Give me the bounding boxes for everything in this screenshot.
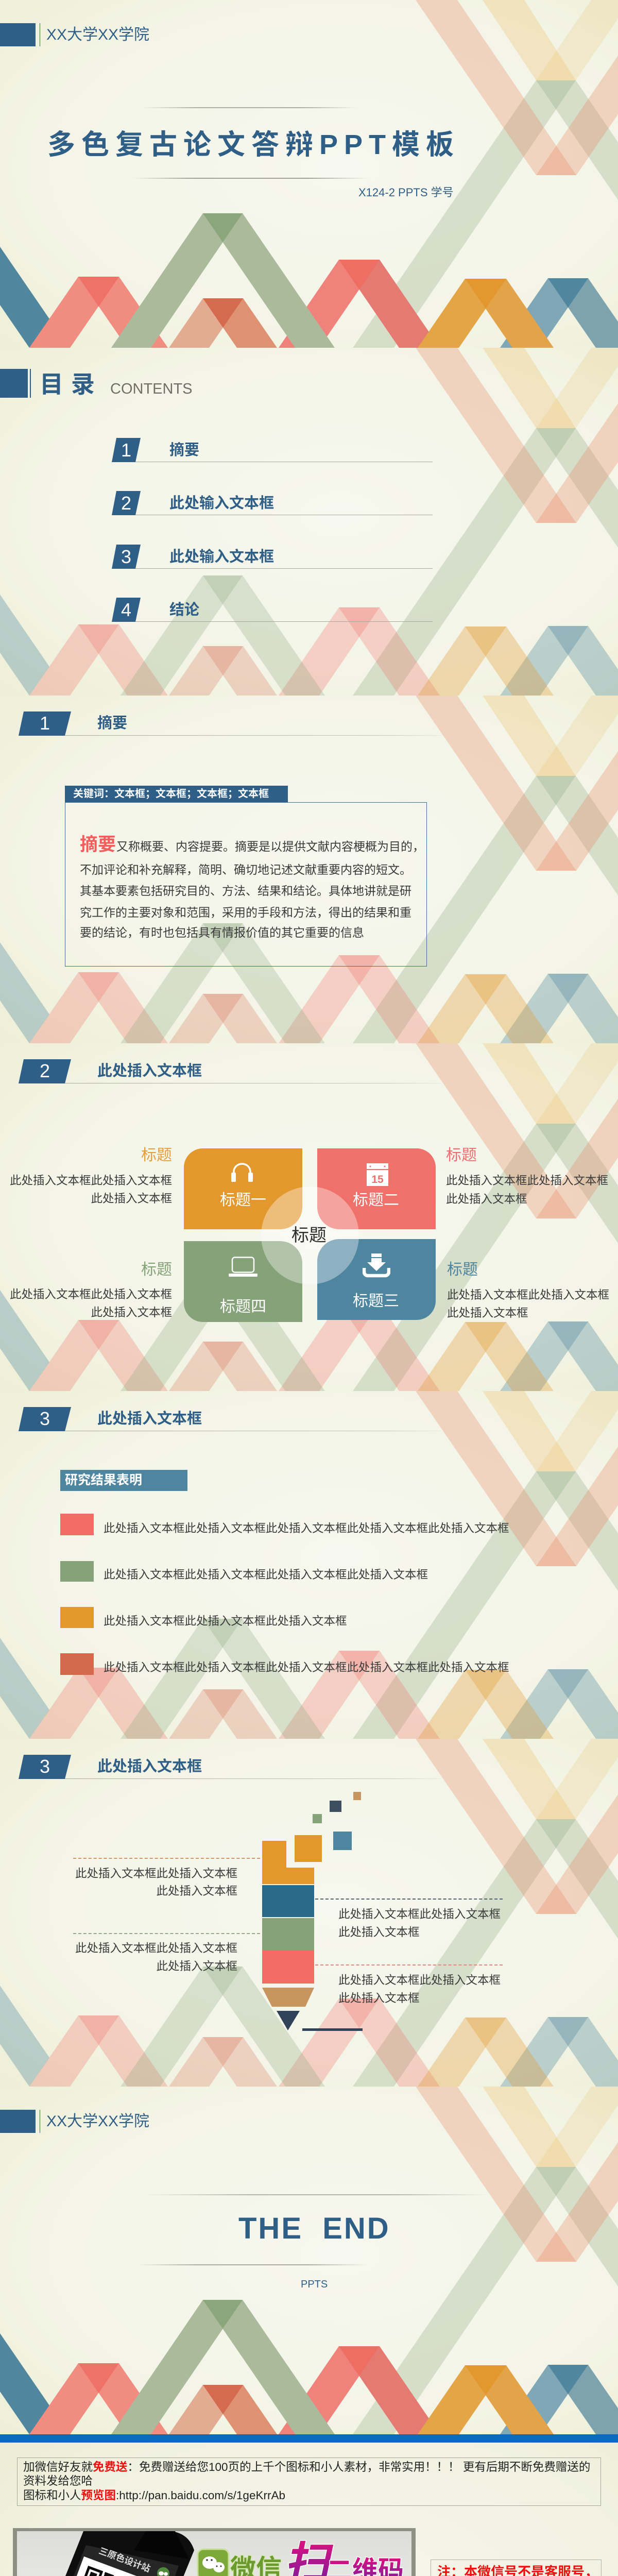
- text block: top right: 此处插入文本框此处插入文本框: [446, 1174, 608, 1187]
- result row 3: 此处插入文本框此处插入文本框此处插入文本框: [104, 1615, 347, 1628]
- callout: lower left: 此处插入文本框: [156, 1960, 237, 1973]
- title: 多色复古论文答辩PPT模板: [47, 129, 460, 160]
- result row 4: 此处插入文本框此处插入文本框此处插入文本框此处插入文本框此处插入文本框: [104, 1661, 509, 1674]
- school header block: [0, 23, 149, 46]
- panel: research results slide: [0, 1391, 618, 1739]
- phone QR code: [52, 2556, 169, 2576]
- section heading 1: 摘要: [97, 715, 127, 732]
- callout: lower left: 此处插入文本框此处插入文本框: [75, 1942, 237, 1955]
- subtitle: X124-2 PPTS 学号: [358, 186, 454, 199]
- text block: bottom left: [10, 1261, 172, 1319]
- centre label: 标题: [291, 1226, 327, 1245]
- text block: bottom right: [447, 1261, 609, 1319]
- promo text box: [17, 2458, 601, 2506]
- text block: bottom right: 标题: [447, 1261, 478, 1278]
- contents heading: [0, 369, 193, 398]
- callout: upper left: 此处插入文本框此处插入文本框: [75, 1867, 237, 1880]
- school header block: XX大学XX学院: [46, 2113, 149, 2130]
- artwork frame: [13, 2528, 416, 2576]
- callout: upper left: [73, 1858, 260, 1897]
- phone app badge: [157, 2567, 169, 2576]
- callout: upper right: 此处插入文本框此处插入文本框: [338, 1908, 501, 1921]
- callout: upper left: 此处插入文本框: [156, 1885, 237, 1897]
- icon: calendar: 15: [371, 1174, 384, 1185]
- section heading 3: [19, 1407, 441, 1431]
- contents heading: CONTENTS: [110, 381, 193, 397]
- contents item 4: 4: [121, 599, 131, 620]
- keywords bar: 关键词：文本框；文本框；文本框；文本框: [73, 788, 269, 800]
- quadrant tile: orange: [184, 1148, 302, 1229]
- background ribbons: abstract: [0, 696, 618, 1043]
- panel: cover slide: [0, 0, 618, 348]
- result row 2: 此处插入文本框此处插入文本框此处插入文本框此处插入文本框: [104, 1568, 428, 1581]
- background ribbons: the end: [0, 2087, 618, 2434]
- top rule: [144, 2194, 489, 2195]
- text block: bottom right: 此处插入文本框: [447, 1307, 528, 1319]
- section heading 2: 此处插入文本框: [97, 1063, 202, 1079]
- contents item 2: [112, 491, 433, 515]
- text block: bottom left: 标题: [141, 1261, 172, 1278]
- section heading 3: 此处插入文本框: [97, 1411, 202, 1427]
- abstract text box: [65, 802, 427, 967]
- contents item 1: [112, 438, 433, 462]
- background ribbons: quadrant: [0, 1043, 618, 1391]
- results label bar: [60, 1470, 187, 1491]
- contents item 4: [112, 598, 433, 622]
- background ribbons: results: [0, 1391, 618, 1739]
- contents heading: 目录: [40, 371, 102, 398]
- background ribbons: contents: [0, 348, 618, 696]
- keywords bar: [65, 786, 288, 802]
- quadrant tile: red: [317, 1148, 436, 1229]
- top decorative rule: [142, 107, 358, 108]
- note box: [431, 2560, 602, 2576]
- text block: top right: 标题: [446, 1147, 477, 1164]
- contents item 4: 结论: [169, 602, 199, 618]
- contents item 1: 1: [121, 439, 131, 461]
- text block: bottom left: 此处插入文本框此处插入文本框: [10, 1288, 172, 1301]
- text block: bottom left: 此处插入文本框: [91, 1306, 172, 1319]
- abstract paragraph: 究工作的主要对象和范围，采用的手段和方法，得出的结果和重: [80, 906, 411, 919]
- callout: upper right: [315, 1899, 503, 1938]
- abstract paragraph: 摘要: [80, 835, 116, 855]
- contents item 2: 2: [121, 493, 131, 514]
- contents item 3: [112, 545, 433, 569]
- school header block: [0, 2110, 149, 2133]
- panel: table of contents slide: [0, 348, 618, 696]
- callout: lower right: [315, 1964, 503, 2004]
- result row 2: [60, 1561, 406, 1582]
- phone caption: site name: 三原色设计站: [97, 2546, 152, 2574]
- promo text box: 加微信好友就免费送：免费赠送给您100页的上千个图标和小人素材，非常实用！！！ 更有后期不断免费赠送的: [23, 2461, 590, 2473]
- result row 3: [60, 1607, 406, 1628]
- bottom rule: [138, 2264, 367, 2265]
- abstract paragraph: 不加评论和补充解释，简明、确切地记述文献重要内容的短文。: [80, 863, 411, 876]
- results label bar: 研究结果表明: [65, 1473, 142, 1487]
- text block: bottom right: 此处插入文本框此处插入文本框: [447, 1289, 609, 1301]
- quadrant tile: red: 标题二: [353, 1192, 399, 1209]
- promo text box: 图标和小人预览图:http://pan.baidu.com/s/1geKrrAb: [23, 2489, 285, 2502]
- callout: lower left: [73, 1933, 260, 1973]
- phone body: [19, 2531, 194, 2576]
- result row 1: [60, 1514, 509, 1535]
- callout: upper right: 此处插入文本框: [338, 1926, 420, 1939]
- abstract paragraph: 又称概要、内容提要。摘要是以提供文献内容梗概为目的，: [116, 840, 424, 853]
- panel: pencil diagram slide: [0, 1739, 618, 2087]
- blue divider band: [0, 2434, 618, 2443]
- section heading 3 repeat: [19, 1755, 441, 1779]
- background ribbons: pencil: [0, 1739, 618, 2087]
- callout: lower right: 此处插入文本框此处插入文本框: [338, 1974, 501, 1987]
- centre translucent circle: [261, 1187, 359, 1284]
- quadrant tile: blue: 标题三: [353, 1293, 399, 1310]
- school header block: XX大学XX学院: [46, 26, 149, 43]
- abstract paragraph: 其基本要素包括研究目的、方法、结果和结论。具体地讲就是研: [80, 884, 411, 897]
- background ribbons: cover: [0, 0, 618, 348]
- text block: top right: [446, 1147, 608, 1206]
- section heading 1: 1: [40, 713, 50, 734]
- promo text box: 资料发给您哈: [23, 2475, 93, 2487]
- panel: promotional footer: [0, 2443, 618, 2576]
- closing subtitle: PPTS: [301, 2279, 328, 2290]
- wechat QR promo artwork: [13, 2528, 416, 2576]
- quadrant tile: orange: 标题一: [220, 1192, 266, 1209]
- section heading 2: [19, 1059, 441, 1083]
- bottom decorative rule: [132, 178, 369, 179]
- text block: top right: 此处插入文本框: [446, 1193, 527, 1206]
- closing title: THE END: [238, 2212, 390, 2245]
- text block: top left: 标题: [141, 1147, 172, 1164]
- section heading 3 repeat: 此处插入文本框: [97, 1758, 202, 1775]
- section heading 1: [19, 711, 441, 736]
- result row 4: [60, 1653, 406, 1675]
- icon: laptop: [229, 1257, 258, 1277]
- callout: lower right: 此处插入文本框: [338, 1992, 420, 2005]
- section heading 3: 3: [40, 1408, 50, 1429]
- pencil graphic: [260, 1790, 366, 2032]
- quadrant tile: green: [184, 1241, 302, 1322]
- wechat logo: [198, 2549, 229, 2576]
- section heading 2: 2: [40, 1060, 50, 1081]
- panel: the end slide: [0, 2087, 618, 2434]
- icon: calendar: [367, 1163, 388, 1186]
- abstract paragraph: [80, 835, 424, 939]
- contents item 3: 3: [121, 546, 131, 567]
- quadrant tile: green: 标题四: [220, 1298, 266, 1315]
- panel: abstract slide: [0, 696, 618, 1043]
- contents item 1: 摘要: [169, 442, 199, 459]
- section heading 3 repeat: 3: [40, 1756, 50, 1777]
- contents item 2: 此处输入文本框: [169, 495, 274, 512]
- panel: four quadrant slide: [0, 1043, 618, 1391]
- icon: download tray: [363, 1253, 390, 1278]
- abstract paragraph: 要的结论，有时也包括具有情报价值的其它重要的信息: [80, 926, 364, 939]
- text block: top left: 此处插入文本框此处插入文本框: [10, 1174, 172, 1187]
- contents item 3: 此处输入文本框: [169, 549, 274, 565]
- quadrant tile: blue: [317, 1239, 436, 1320]
- icon: headphones: [231, 1163, 253, 1182]
- result row 1: 此处插入文本框此处插入文本框此处插入文本框此处插入文本框此处插入文本框: [104, 1522, 509, 1535]
- text block: top left: [10, 1147, 172, 1205]
- text block: top left: 此处插入文本框: [91, 1192, 172, 1205]
